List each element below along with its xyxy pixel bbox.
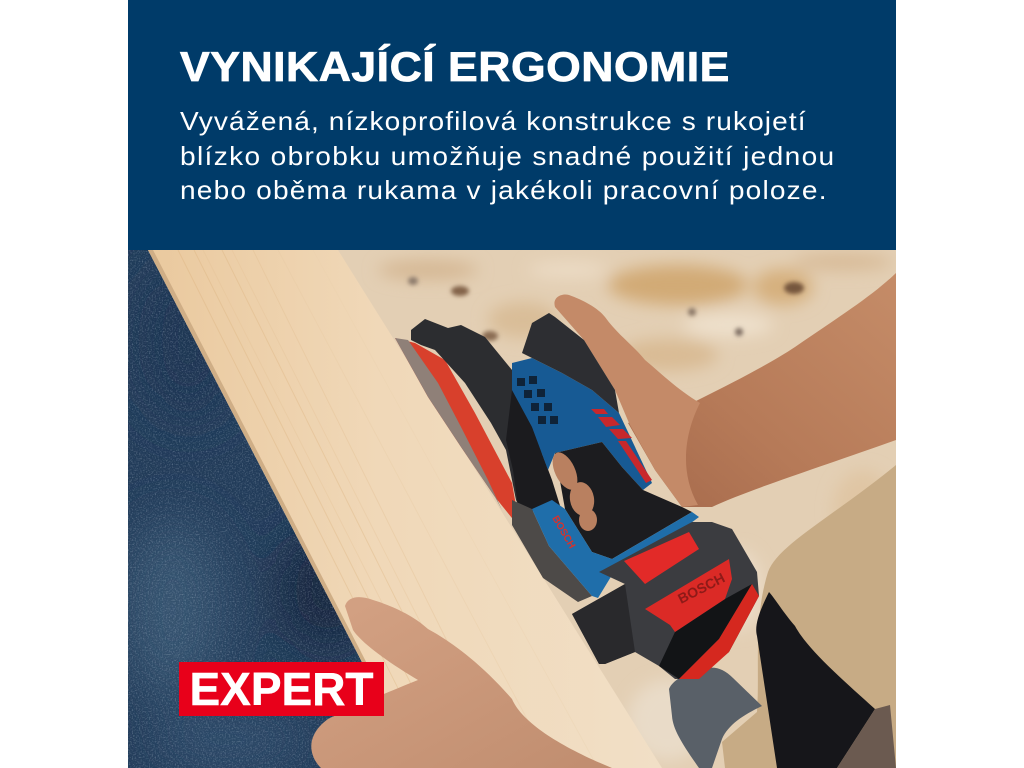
- blue asphalt surface: [128, 250, 362, 768]
- photo: hands using Bosch sander on a wooden board: [128, 250, 896, 768]
- red stripes: [591, 409, 652, 483]
- battery gloss: [659, 584, 752, 679]
- battery red base: [679, 584, 759, 679]
- shoe: [669, 668, 762, 768]
- lower blue body: [532, 500, 699, 598]
- lower hand: [311, 597, 612, 768]
- dust guard ring: [411, 319, 545, 525]
- body text: Vyvážená, nízkoprofilová konstrukce s rukojetí: [180, 106, 807, 136]
- trousers: [722, 465, 896, 768]
- forearm and hand: [554, 273, 896, 507]
- wooden board: [148, 250, 662, 768]
- Bosch logo plate text: BOSCH: [549, 514, 577, 551]
- body text: [180, 106, 836, 205]
- lower grey base: [512, 500, 592, 602]
- body text: nebo oběma rukama v jakékoli pracovní poloze.: [180, 175, 828, 205]
- fingers on handle: [547, 449, 597, 531]
- sander: [395, 313, 759, 679]
- header panel: [128, 0, 896, 250]
- plywood background: [128, 250, 896, 768]
- black handle: [555, 442, 692, 559]
- plywood knots: [408, 277, 804, 341]
- blue motor body: [512, 358, 652, 490]
- battery: [572, 522, 759, 679]
- EXPERT badge: EXPERT: [189, 663, 374, 715]
- rear black grip: [522, 313, 619, 413]
- vent grille: [517, 376, 558, 424]
- sanding disc: [395, 338, 520, 528]
- title: VYNIKAJÍCÍ ERGONOMIE: [180, 43, 730, 90]
- battery red label: [645, 559, 732, 632]
- battery red label: BOSCH: [675, 569, 727, 607]
- dark motor housing: [506, 390, 562, 520]
- body text: blízko obrobku umožňuje snadné použití jednou: [180, 140, 836, 170]
- battery red handle: [624, 532, 699, 584]
